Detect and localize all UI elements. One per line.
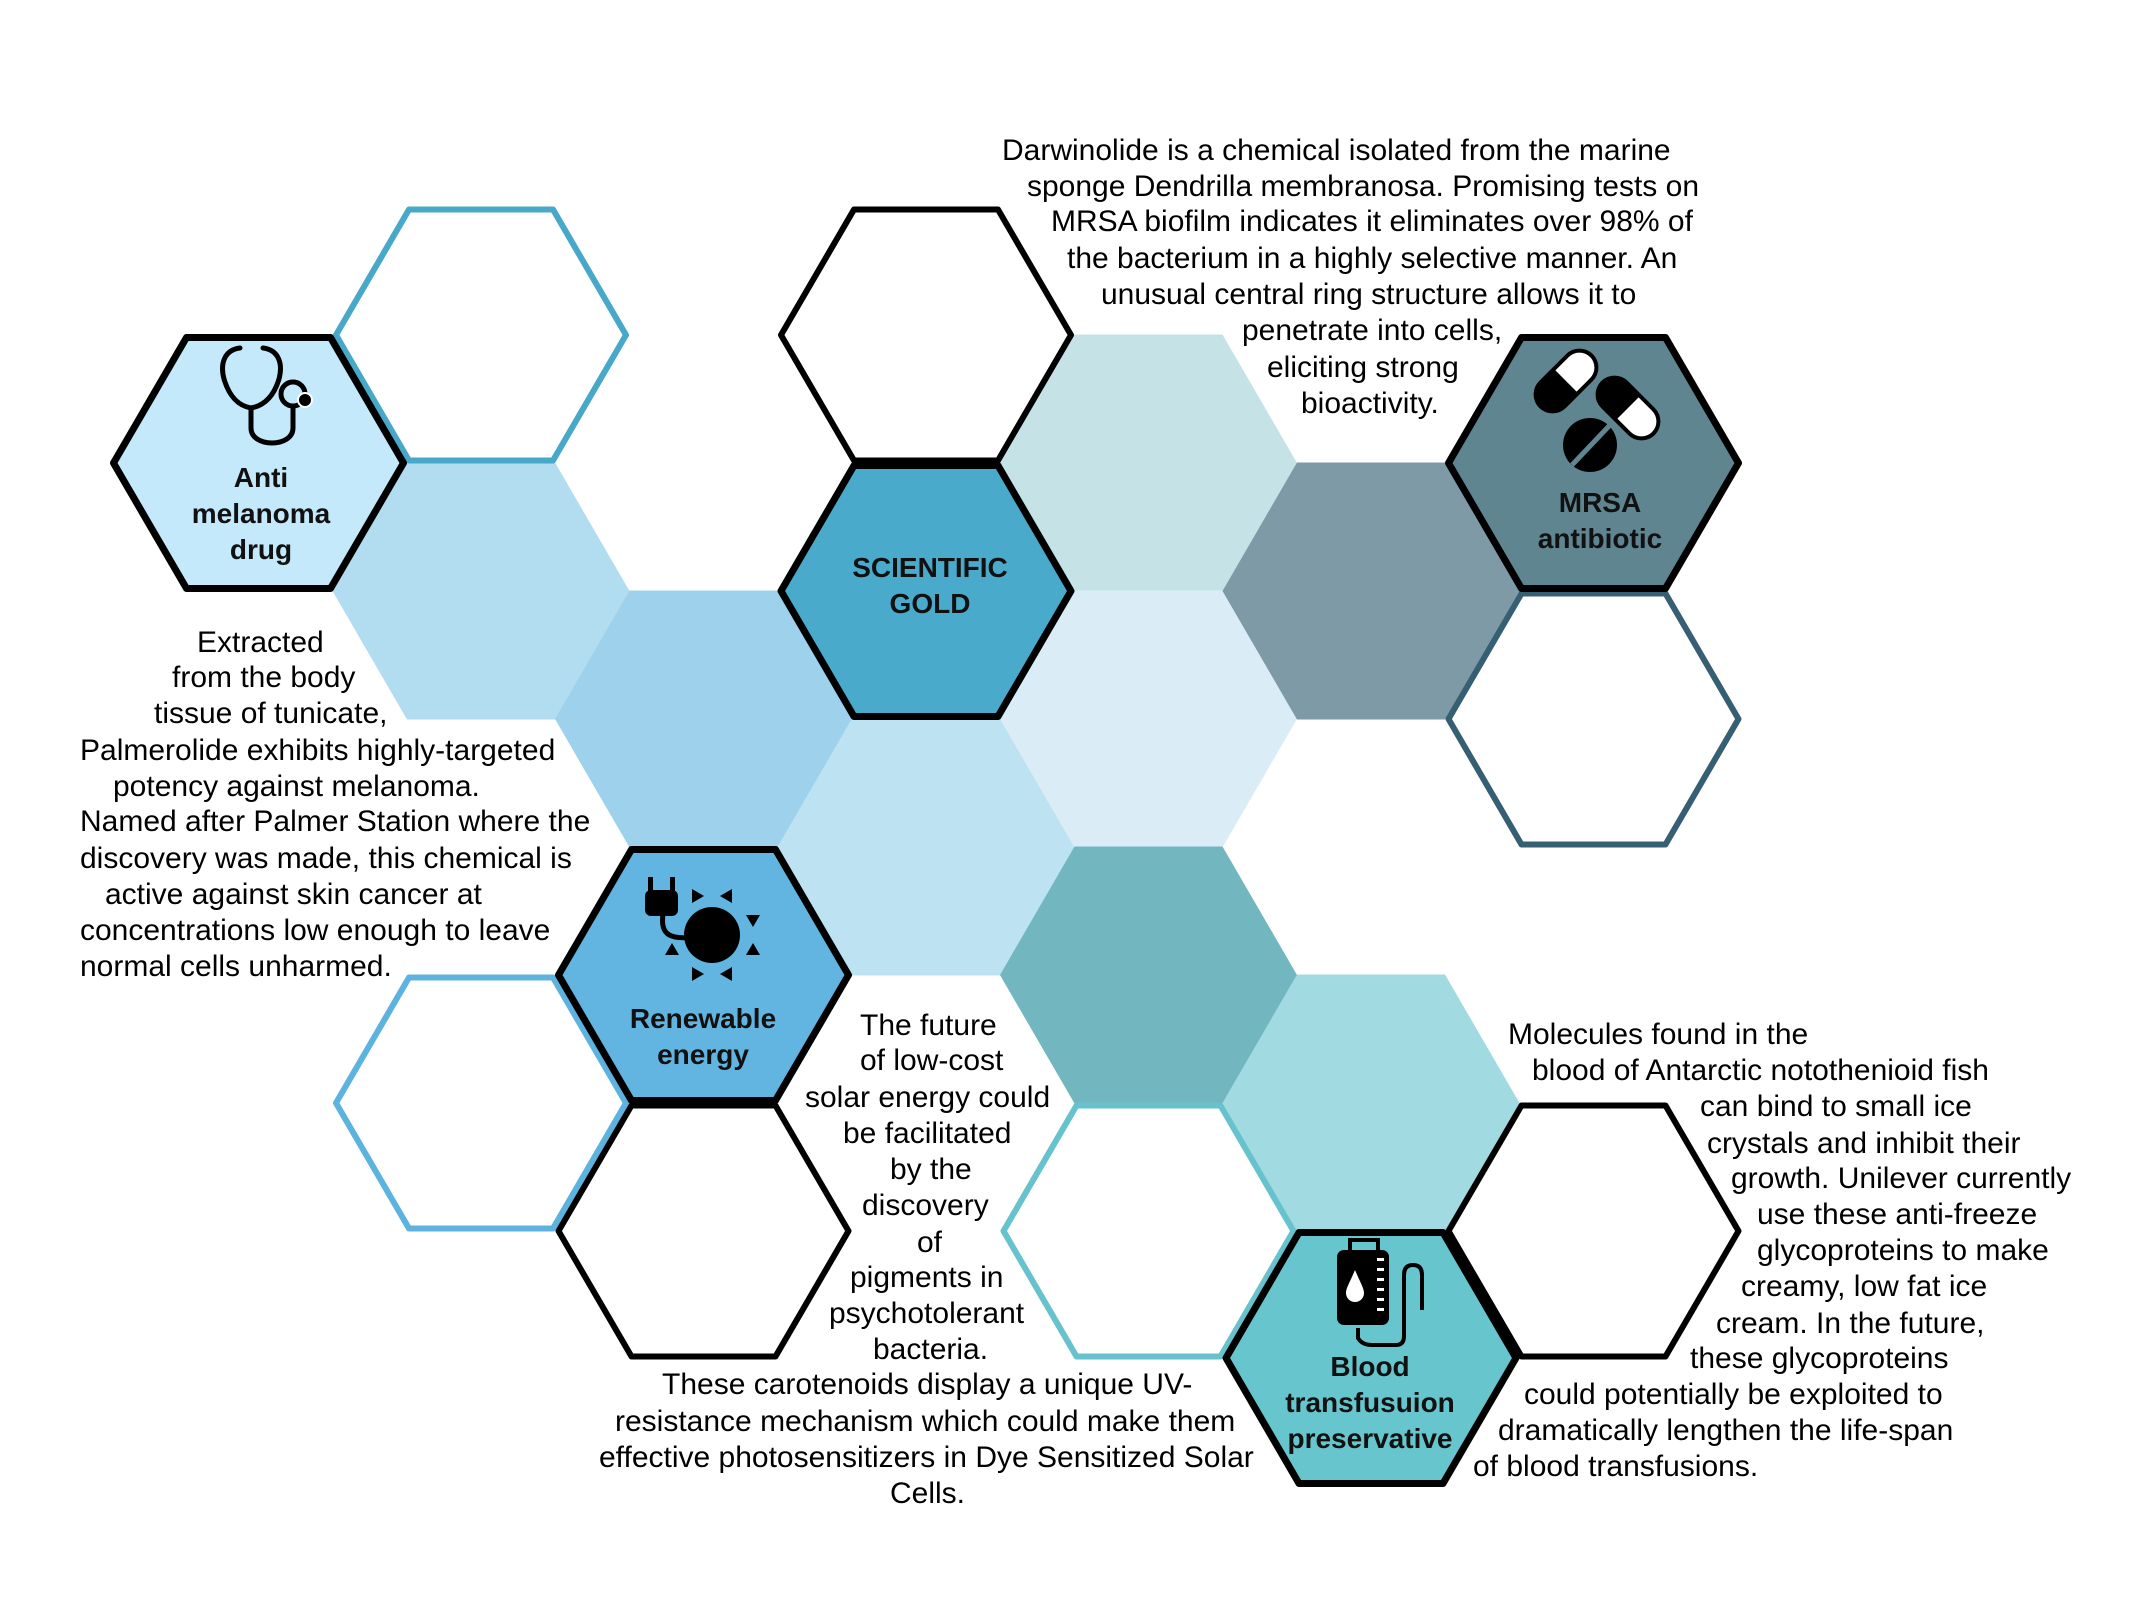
label: MRSA antibiotic: MRSA — [1559, 487, 1641, 518]
text block: antifreeze glycoproteins: glycoproteins to make — [1757, 1234, 2049, 1267]
label: blood transfusion preservative — [1285, 1351, 1455, 1454]
text block: antifreeze glycoproteins: of blood transfusions. — [1473, 1450, 1758, 1483]
hex: renewable energy — [558, 850, 848, 1100]
text block: renewable energy: resistance mechanism which could make them — [615, 1405, 1235, 1438]
text block: palmerolide: Named after Palmer Station where the — [80, 805, 590, 838]
label: scientific gold: GOLD — [890, 588, 970, 619]
text block: antifreeze glycoproteins: could potentially be exploited to — [1524, 1378, 1943, 1411]
text block: palmerolide: concentrations low enough to leave — [80, 914, 550, 947]
hex: anti melanoma — [114, 338, 404, 588]
text block: antifreeze glycoproteins: growth. Unilever currently — [1731, 1162, 2071, 1195]
text block: renewable energy: of — [917, 1226, 942, 1259]
text block: palmerolide: from the body — [172, 661, 355, 694]
text block: palmerolide: Palmerolide exhibits highly-targeted — [80, 734, 555, 767]
text block: renewable energy: pigments in — [850, 1261, 1003, 1294]
label: blood transfusion preservative: preservative — [1287, 1423, 1452, 1454]
text block: darwinolide: unusual central ring structure allows it to — [1101, 278, 1636, 311]
text block: antifreeze glycoproteins: Molecules found in the — [1508, 1018, 1808, 1051]
filled hexes — [332, 334, 1520, 1232]
text block: antifreeze glycoproteins: these glycoproteins — [1690, 1342, 1948, 1375]
label: renewable energy: Renewable — [630, 1003, 776, 1034]
text block: renewable energy: discovery — [862, 1189, 989, 1222]
text block: palmerolide: normal cells unharmed. — [80, 950, 392, 983]
label: scientific gold: SCIENTIFIC — [852, 552, 1008, 583]
text block: antifreeze glycoproteins: dramatically lengthen the life-span — [1498, 1414, 1953, 1447]
hex: blood transfusion — [1226, 1232, 1516, 1484]
text block: renewable energy: be facilitated — [843, 1117, 1011, 1150]
text block: renewable energy: psychotolerant — [829, 1297, 1024, 1330]
hex: scientific gold — [781, 466, 1071, 716]
text block: palmerolide: active against skin cancer at — [105, 878, 482, 911]
text block: renewable energy: The future — [860, 1009, 997, 1042]
label: MRSA antibiotic: antibiotic — [1538, 523, 1662, 554]
text block: antifreeze glycoproteins: use these anti-freeze — [1757, 1198, 2037, 1231]
text block: darwinolide: Darwinolide is a chemical isolated from the marine — [1002, 134, 1671, 167]
label: anti melanoma drug: Anti — [234, 462, 288, 493]
text block: palmerolide: tissue of tunicate, — [154, 697, 387, 730]
text block: renewable energy: These carotenoids display a unique UV- — [662, 1368, 1192, 1401]
outline hexes — [336, 210, 1738, 1356]
icon: stethoscope — [223, 348, 312, 443]
text block: antifreeze glycoproteins: cream. In the future, — [1716, 1307, 1984, 1340]
text block: palmerolide: potency against melanoma. — [113, 770, 480, 803]
text block: palmerolide: Extracted — [197, 626, 324, 659]
icon: solar plug — [645, 877, 760, 981]
label: blood transfusion preservative: transfusuion — [1285, 1387, 1455, 1418]
label: MRSA antibiotic — [1538, 487, 1662, 554]
text block: darwinolide: MRSA biofilm indicates it eliminates over 98% of — [1051, 205, 1693, 238]
text block: renewable energy: solar energy could — [805, 1081, 1050, 1114]
text block: antifreeze glycoproteins: creamy, low fat ice — [1741, 1270, 1987, 1303]
hex: MRSA antibiotic — [1448, 338, 1738, 588]
label: renewable energy — [630, 1003, 776, 1070]
text block: renewable energy: effective photosensitizers in Dye Sensitized Solar — [599, 1441, 1254, 1474]
label: anti melanoma drug: melanoma — [192, 498, 330, 529]
text block: antifreeze glycoproteins: blood of Antarctic notothenioid fish — [1532, 1054, 1989, 1087]
text block: renewable energy: by the — [890, 1153, 972, 1186]
text block: antifreeze glycoproteins: crystals and inhibit their — [1707, 1127, 2020, 1160]
text block: darwinolide: sponge Dendrilla membranosa. Promising tests on — [1027, 170, 1699, 203]
icon: blood bag — [1337, 1240, 1422, 1345]
label: renewable energy: energy — [657, 1039, 749, 1070]
text block: renewable energy: bacteria. — [873, 1333, 988, 1366]
text block: antifreeze glycoproteins: can bind to small ice — [1700, 1090, 1972, 1123]
text block: darwinolide: bioactivity. — [1301, 387, 1439, 420]
label: anti melanoma drug — [192, 462, 330, 565]
text block: darwinolide: penetrate into cells, — [1242, 314, 1502, 347]
icon: pills — [1526, 341, 1668, 472]
label: blood transfusion preservative: Blood — [1330, 1351, 1410, 1382]
label: anti melanoma drug: drug — [230, 534, 292, 565]
text block: renewable energy: Cells. — [890, 1477, 965, 1510]
text block: darwinolide: the bacterium in a highly selective manner. An — [1067, 242, 1677, 275]
text block: palmerolide: discovery was made, this chemical is — [80, 842, 572, 875]
text block: renewable energy: of low-cost — [860, 1044, 1003, 1077]
label: scientific gold — [852, 552, 1008, 619]
text block: darwinolide: eliciting strong — [1267, 351, 1459, 384]
